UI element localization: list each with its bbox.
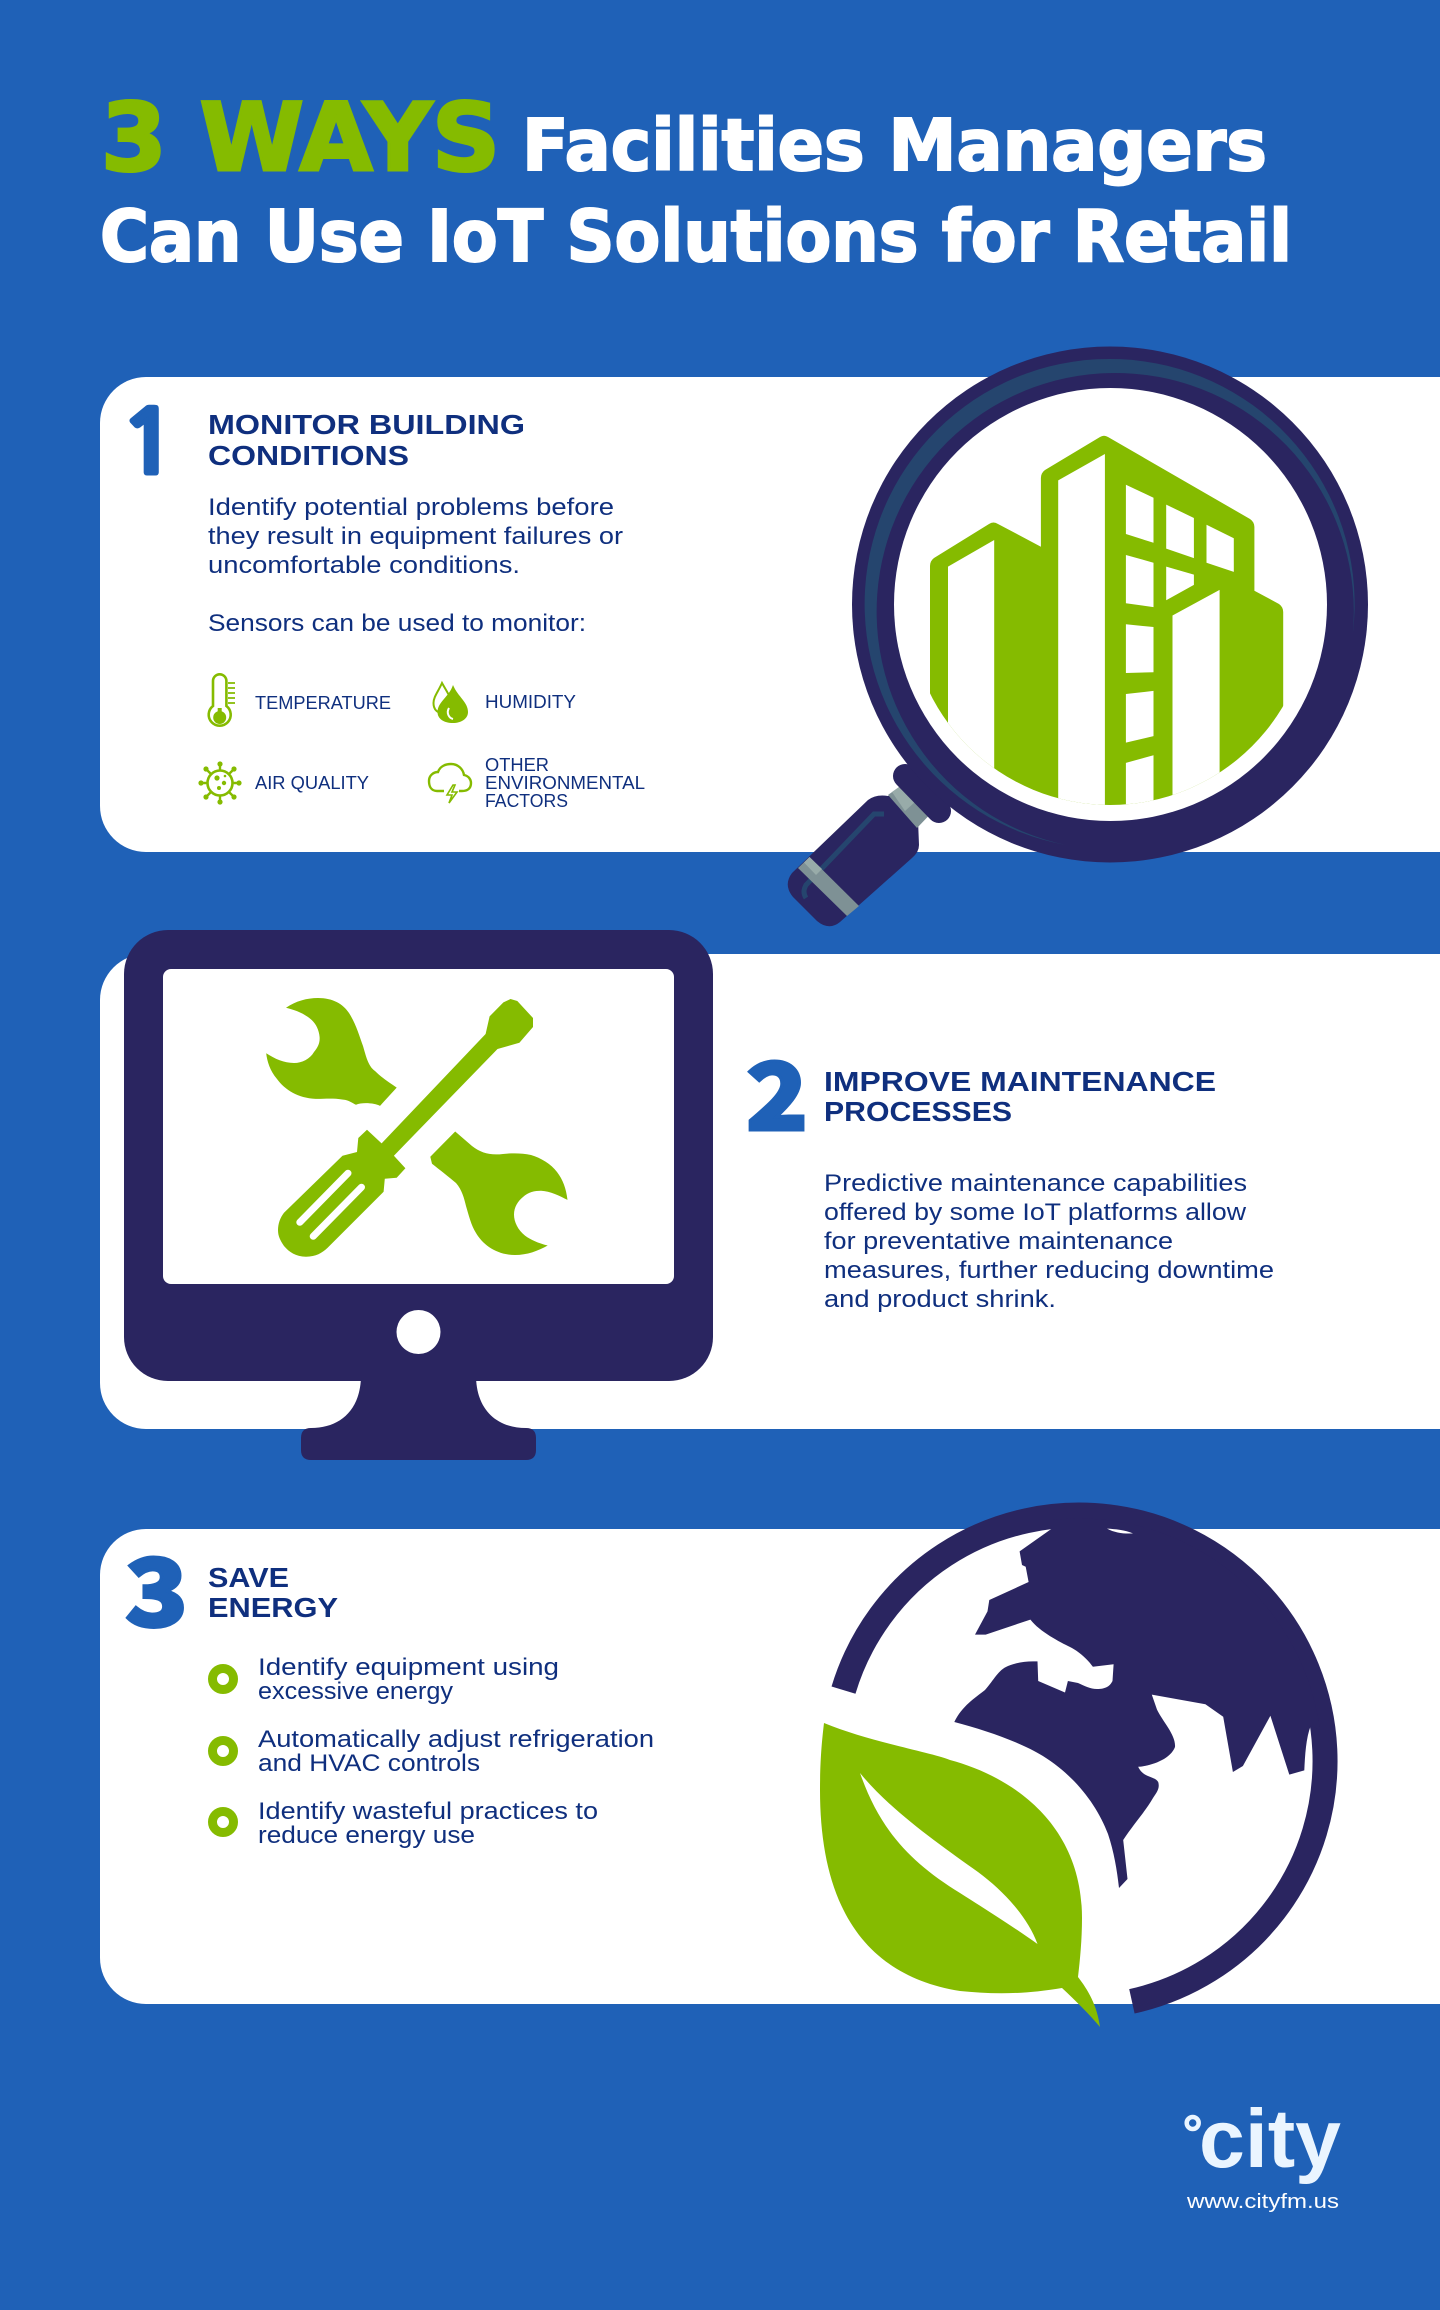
monitor body [124,930,713,1381]
icon: storm cloud [429,764,471,803]
text: intro [208,494,623,637]
bullet 1: excessive energy [258,1678,454,1705]
text: maintenance body: Predictive maintenance capabilities [824,1170,1247,1197]
heading: monitor building conditions [208,409,525,471]
label: other environmental factors: OTHER [485,755,549,775]
text: maintenance body [824,1170,1274,1313]
icon: computer monitor with tools [124,930,713,1460]
text: maintenance body: measures, further reducing downtime [824,1257,1274,1284]
heading: monitor building conditions: MONITOR BUILDING [208,409,525,440]
icon: magnifying glass with building [788,346,1368,926]
text: intro: Sensors can be used to monitor: [208,610,586,637]
label: humidity: HUMIDITY [485,692,576,712]
text: maintenance body: for preventative maintenance [824,1228,1173,1255]
logo: city: www.cityfm.us [1186,2191,1339,2213]
bullet 2: and HVAC controls [258,1750,480,1777]
number 1: 1 [119,400,179,487]
heading: save energy [208,1562,338,1623]
text: intro: they result in equipment failures or [208,523,623,550]
bullet 2 [212,1726,654,1777]
text: intro: Identify potential problems before [208,494,614,521]
icon: air quality [198,761,242,805]
icon: thermometer [209,674,235,726]
heading: improve maintenance processes: PROCESSES [824,1096,1012,1127]
text: maintenance body: offered by some IoT platforms allow [824,1199,1246,1226]
title [100,84,1292,278]
text: maintenance body: and product shrink. [824,1286,1056,1313]
label: air quality: AIR QUALITY [255,773,369,793]
number 3: 3 [125,1518,188,1653]
screwdriver [278,999,533,1257]
building [930,436,1284,805]
text: intro: uncomfortable conditions. [208,552,520,579]
wrench top left [266,998,397,1106]
label: other environmental factors [485,755,645,811]
ice sliver [1107,1529,1133,1534]
leaf [820,1723,1100,2027]
title: Facilities Managers [522,104,1267,187]
heading: improve maintenance processes: IMPROVE MAINTENANCE [824,1066,1216,1097]
icon: globe with leaf [820,1515,1325,2027]
heading: monitor building conditions: CONDITIONS [208,440,409,471]
icon: humidity drops [434,683,468,723]
bullet 3: Identify wasteful practices to [258,1798,598,1825]
bullet 3 [212,1798,598,1849]
panel: monitor building conditions [100,377,1440,852]
bullet 1: Identify equipment using [258,1654,559,1681]
bullet 3: reduce energy use [258,1822,475,1849]
panel: save energy [100,1518,1440,2004]
number 2: 2 [746,1022,808,1157]
title: 3 WAYS [101,84,500,193]
title: Can Use IoT Solutions for Retail [100,195,1292,278]
heading: save energy: SAVE [208,1562,289,1593]
bullet 2: Automatically adjust refrigeration [258,1726,654,1753]
monitor stand [301,1375,536,1460]
label: other environmental factors: FACTORS [485,791,568,811]
magnifier ring [852,346,1368,862]
heading: improve maintenance processes [824,1066,1216,1127]
camera dot [396,1310,440,1354]
globe ring [844,1515,1325,2001]
panel: improve maintenance processes [100,954,1440,1429]
heading: save energy: ENERGY [208,1592,338,1623]
label: other environmental factors: ENVIRONMENTAL [485,773,645,793]
label: temperature: TEMPERATURE [255,693,391,713]
bullet 1 [212,1654,559,1705]
monitor screen [163,969,674,1284]
logo: city: city [1199,2092,1341,2185]
wrench bottom right [430,1132,568,1255]
continents [954,1518,1320,1888]
magnifier handle [788,776,939,926]
logo: city [1186,2092,1341,2213]
